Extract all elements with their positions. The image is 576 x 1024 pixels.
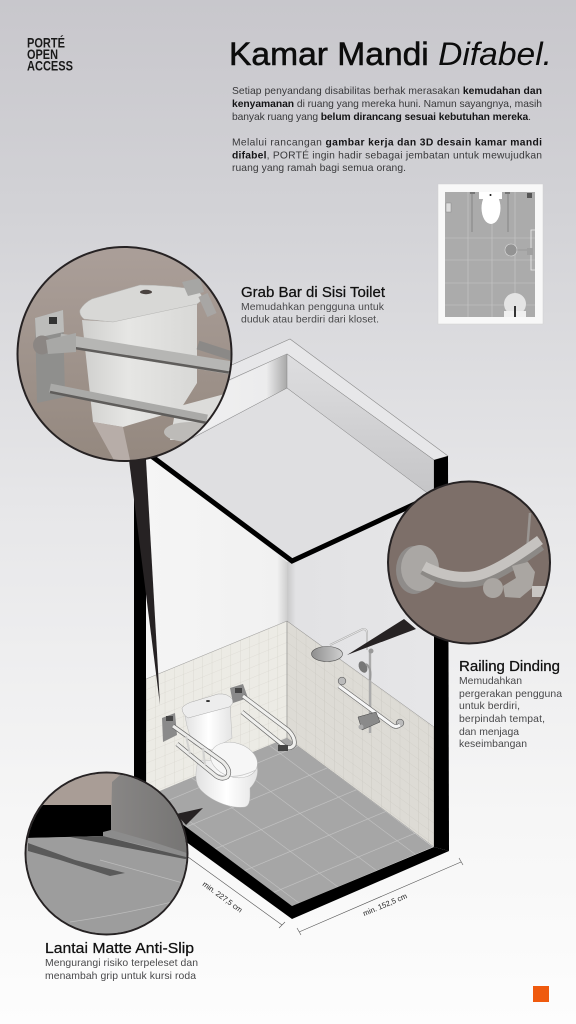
pipe behind — [526, 513, 530, 565]
cistern body — [82, 303, 197, 427]
label: railing: untuk berdiri, — [459, 701, 520, 712]
ceiling face — [155, 388, 434, 562]
toilet lid — [182, 694, 233, 718]
plan: toilet — [479, 192, 502, 224]
bar shadow — [28, 843, 125, 876]
detail circle: anti-slip floor — [24, 772, 190, 936]
floor dimension: min. 152,5 cm: min. 152,5 cm — [362, 891, 408, 918]
label: grab bar: duduk atau berdiri dari kloset. — [241, 314, 379, 326]
floor dimension: min. 227,5 cm: min. 227,5 cm — [201, 879, 244, 914]
pointer: railing — [347, 619, 416, 655]
left wall — [146, 450, 287, 797]
toilet seat — [170, 394, 222, 440]
label: railing: Memudahkan — [459, 676, 522, 687]
black floor slab — [134, 785, 449, 919]
wall plate — [35, 324, 65, 403]
intro paragraph 1: kenyamanan di ruang yang mereka huni. Namun sayangnya, masih — [232, 99, 542, 110]
toilet — [182, 694, 262, 807]
toilet base — [196, 760, 258, 807]
intro paragraph 1: Setiap penyandang disabilitas berhak merasakan kemudahan dan — [232, 86, 542, 97]
upper back wall right strip — [287, 354, 434, 500]
grab bar right — [230, 684, 294, 751]
intro paragraph 2: ruang yang ramah bagi semua orang. — [232, 163, 406, 174]
right wall tiles — [287, 621, 434, 847]
shower set — [312, 629, 404, 733]
intro paragraph 1: banyak ruang yang belum dirancang sesuai kebutuhan mereka. — [232, 112, 531, 123]
label: railing: keseimbangan — [459, 739, 527, 750]
title: Kamar Mandi Difabel. — [229, 36, 552, 72]
top rim outline — [180, 339, 448, 460]
logo: PORTÉ Open Access: PORTÉ — [27, 34, 65, 50]
rail — [424, 544, 540, 581]
lower bar — [50, 388, 207, 419]
black column right — [434, 456, 449, 851]
label: railing: Railing Dinding — [459, 659, 560, 675]
intro paragraph 1 — [232, 86, 542, 123]
label: grab bar: Grab Bar di Sisi Toilet — [241, 285, 385, 301]
label: floor: Mengurangi risiko terpeleset dan — [45, 958, 198, 969]
intro paragraph 2: Melalui rancangan gambar kerja dan 3D desain kamar mandi — [232, 138, 542, 148]
label: railing: berpindah tempat, — [459, 714, 545, 725]
logo: PORTÉ Open Access: OPEN — [27, 46, 58, 62]
floor plan thumbnail — [438, 184, 543, 324]
label: railing — [459, 659, 562, 750]
floor dimension: min. 152,5 cm — [297, 858, 463, 935]
intro paragraph 2 — [232, 138, 542, 174]
detail circle: railing — [387, 480, 552, 645]
toilet base silhouette — [110, 775, 186, 853]
label: floor: Lantai Matte Anti-Slip — [45, 941, 194, 957]
orange brand square — [533, 986, 549, 1002]
logo: PORTÉ Open Access: ACCESS — [27, 58, 73, 74]
detail circle: grab bar — [16, 246, 232, 462]
logo: PORTÉ Open Access — [27, 34, 73, 74]
right wall — [287, 497, 434, 847]
label: railing: pergerakan pengguna — [459, 689, 562, 700]
wall flange — [396, 546, 423, 594]
floor dimension: min. 227,5 cm — [188, 857, 285, 928]
floor — [25, 836, 190, 936]
mixer valve — [483, 562, 552, 598]
label: floor — [45, 941, 198, 982]
cistern lid — [80, 285, 202, 322]
pointer: grab bar — [129, 460, 160, 705]
black baseboard — [25, 805, 111, 838]
label: floor: menambah grip untuk kursi roda — [45, 971, 196, 982]
black column left — [134, 455, 146, 800]
bathroom isometric illustration — [134, 339, 449, 919]
label: grab bar — [241, 285, 385, 326]
back grab bar — [182, 278, 204, 296]
left wall tiles — [146, 621, 287, 797]
upper back wall left strip — [150, 354, 287, 456]
grab bar left — [162, 713, 229, 778]
upper bar — [60, 340, 232, 368]
toilet tank — [185, 704, 232, 750]
label: grab bar: Memudahkan pengguna untuk — [241, 302, 385, 313]
label: railing: dan menjaga — [459, 727, 519, 738]
black section outline top — [150, 455, 432, 561]
floor — [146, 738, 433, 906]
plan: shower seat — [504, 293, 526, 317]
intro paragraph 2: difabel, PORTÉ ingin hadir sebagai jembatan untuk mewujudkan — [232, 148, 542, 162]
toilet seat — [206, 736, 262, 784]
pointer: floor — [176, 808, 203, 825]
bar knob — [33, 336, 48, 354]
